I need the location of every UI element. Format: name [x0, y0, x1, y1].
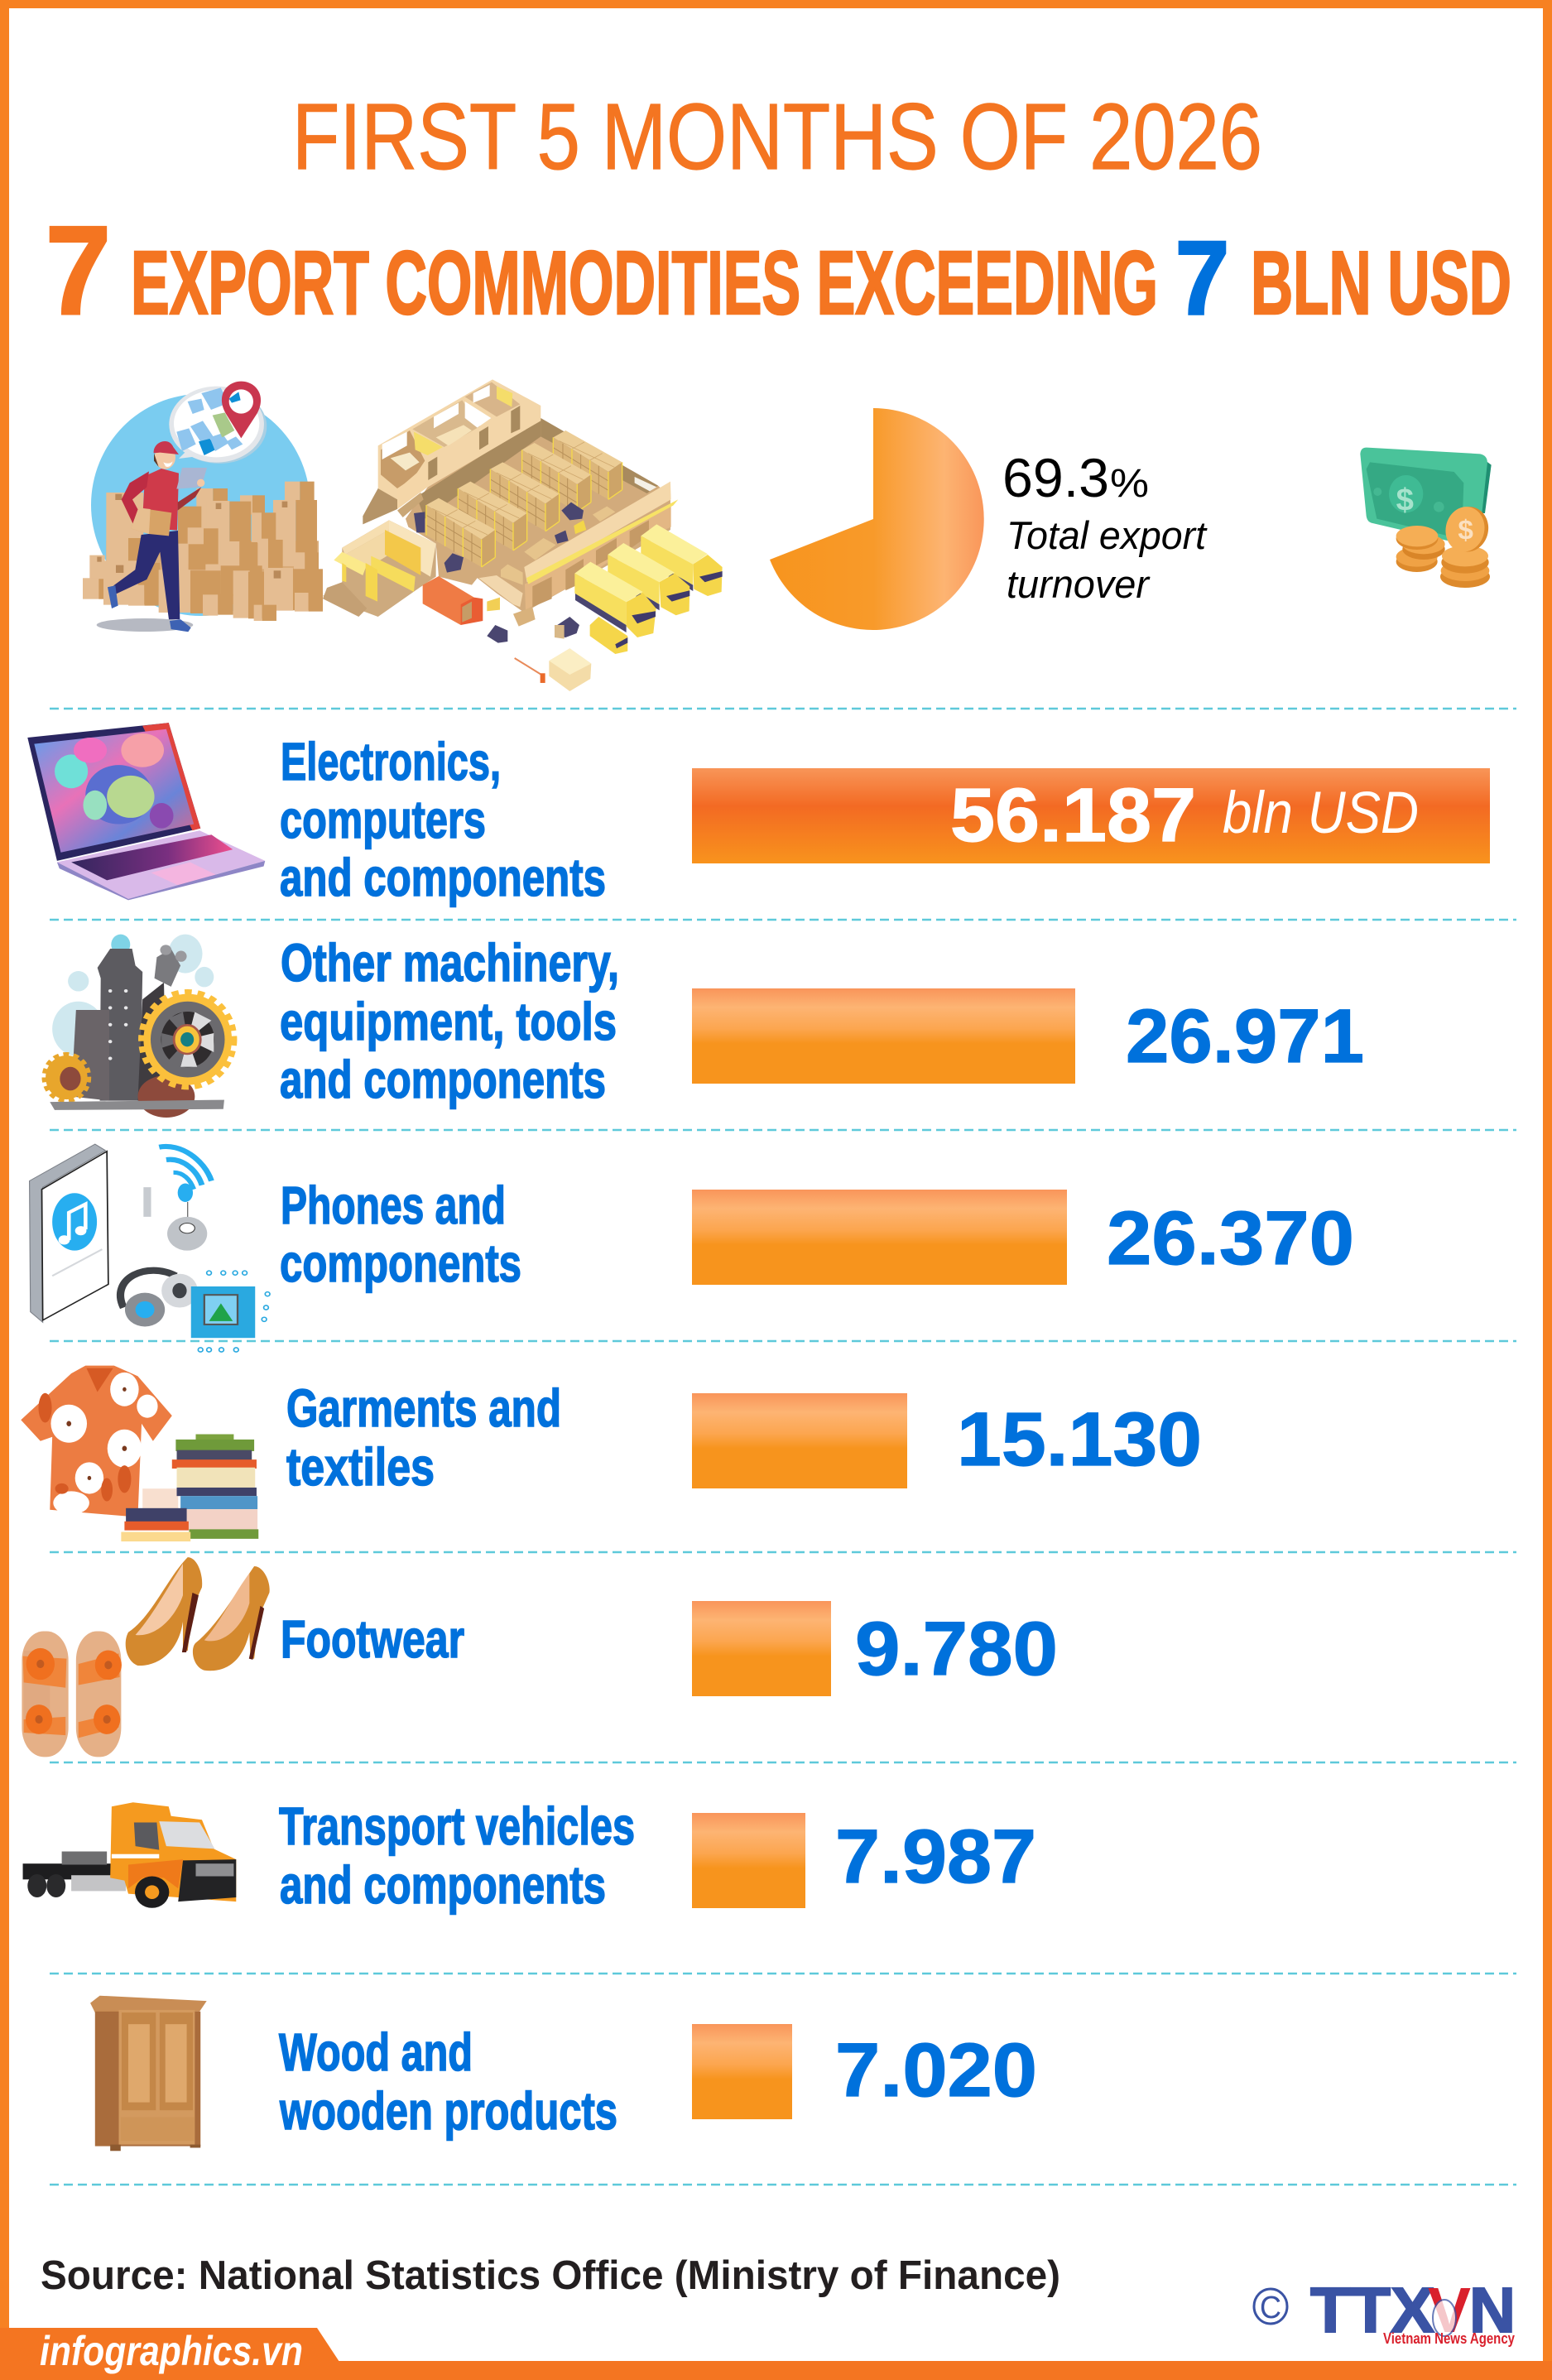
- bar: [692, 2024, 792, 2119]
- label: Electronics,: [281, 732, 501, 791]
- delivery man: [97, 441, 207, 632]
- icon: wardrobe: [90, 1996, 207, 2151]
- bar: [692, 768, 1490, 863]
- value: 26.370: [1107, 1196, 1354, 1281]
- label: Transport vehicles: [279, 1796, 635, 1856]
- logo: TTXVN: TTX: [1310, 2275, 1434, 2346]
- pie label: %: [1110, 462, 1149, 506]
- value: bln USD: [1223, 781, 1419, 846]
- label: and components: [280, 1855, 606, 1915]
- label: textiles: [286, 1437, 435, 1497]
- label: [280, 933, 619, 1109]
- icon: shirt and folded clothes: [21, 1366, 258, 1541]
- icon: truck: [23, 1802, 236, 1908]
- icon: money and coins: $: [1458, 515, 1473, 546]
- map pin: [222, 382, 261, 438]
- label: equipment, tools: [280, 992, 617, 1051]
- value: 15.130: [957, 1397, 1202, 1482]
- label: computers: [280, 790, 486, 849]
- label: [279, 2022, 617, 2141]
- trucks: [574, 524, 723, 637]
- value: 56.187: [950, 773, 1196, 858]
- title: FIRST 5 MONTHS OF 2026: [292, 84, 1262, 189]
- bar: [692, 1813, 805, 1908]
- label: Phones and: [281, 1176, 506, 1235]
- bar: [692, 1190, 1067, 1285]
- footer text: infographics.vn: [40, 2328, 303, 2374]
- label: [286, 1378, 561, 1497]
- logo: TTXVN: Vietnam News Agency: [1383, 2330, 1515, 2347]
- icon: machine with gears: [46, 935, 232, 1118]
- source: Source: National Statistics Office (Ministry of Finance): [41, 2253, 1060, 2298]
- icon: laptop: [27, 723, 265, 900]
- label: Garments and: [286, 1378, 561, 1438]
- row 5: footwear: [22, 1557, 1058, 1757]
- pie chart: 69.3%: [770, 408, 984, 630]
- bar: [692, 1601, 831, 1696]
- map bubble: [169, 387, 267, 464]
- label: Wood and: [279, 2022, 473, 2082]
- pie label: 69.3: [1002, 447, 1109, 508]
- label: [280, 732, 606, 907]
- value: 26.971: [1126, 994, 1364, 1079]
- row 7: wood and wooden products: [90, 1996, 1037, 2151]
- label: components: [280, 1233, 521, 1293]
- title: 7: [46, 200, 111, 341]
- label: and components: [280, 1050, 606, 1109]
- label: and components: [280, 848, 606, 907]
- illustration: delivery man with boxes: [83, 382, 323, 632]
- label: [279, 1796, 635, 1915]
- yard vehicles and gatehouse: [487, 598, 627, 691]
- bar: [692, 988, 1075, 1084]
- logo: TTXVN: C: [1260, 2291, 1281, 2325]
- shipping container: [423, 576, 483, 625]
- pie label: Total export: [1007, 513, 1208, 557]
- value: 9.780: [855, 1607, 1058, 1691]
- row 1: electronics, computers and components: [27, 723, 1490, 907]
- row dividers: [50, 709, 1516, 2185]
- left shop: [323, 520, 436, 617]
- icon: phone, wifi, headphones, chip: [30, 1144, 270, 1352]
- loading dock wall: [478, 482, 678, 610]
- pie label: turnover: [1007, 562, 1151, 606]
- row 6: transport vehicles: [23, 1796, 1036, 1915]
- title: 7: [1175, 219, 1229, 336]
- logo: TTXVN: N: [1469, 2275, 1516, 2346]
- logo: TTXVN: [1254, 2275, 1516, 2347]
- label: Footwear: [281, 1609, 464, 1669]
- row 3: phones and components: [30, 1144, 1354, 1352]
- warehouse floor and walls: [406, 418, 670, 613]
- icon: money and coins: [1360, 448, 1492, 588]
- icon: money and coins: $: [1396, 483, 1414, 518]
- row 4: garments and textiles: [21, 1366, 1202, 1541]
- icon: sandals and high heels: [22, 1557, 270, 1757]
- row 2: other machinery: [46, 933, 1364, 1118]
- pie label: [1002, 447, 1208, 606]
- title: [46, 84, 1511, 341]
- logo: TTXVN: V: [1428, 2275, 1471, 2346]
- label: [280, 1176, 521, 1293]
- bar: [692, 1393, 907, 1488]
- illustration: warehouse: [323, 379, 723, 691]
- value: 7.020: [835, 2028, 1037, 2113]
- footer band: [0, 2328, 1552, 2380]
- value: [950, 773, 1419, 858]
- office block: [363, 379, 541, 524]
- label: Other machinery,: [281, 933, 619, 993]
- value: 7.987: [835, 1815, 1036, 1899]
- label: wooden products: [279, 2081, 617, 2141]
- pallet racks: [414, 430, 622, 585]
